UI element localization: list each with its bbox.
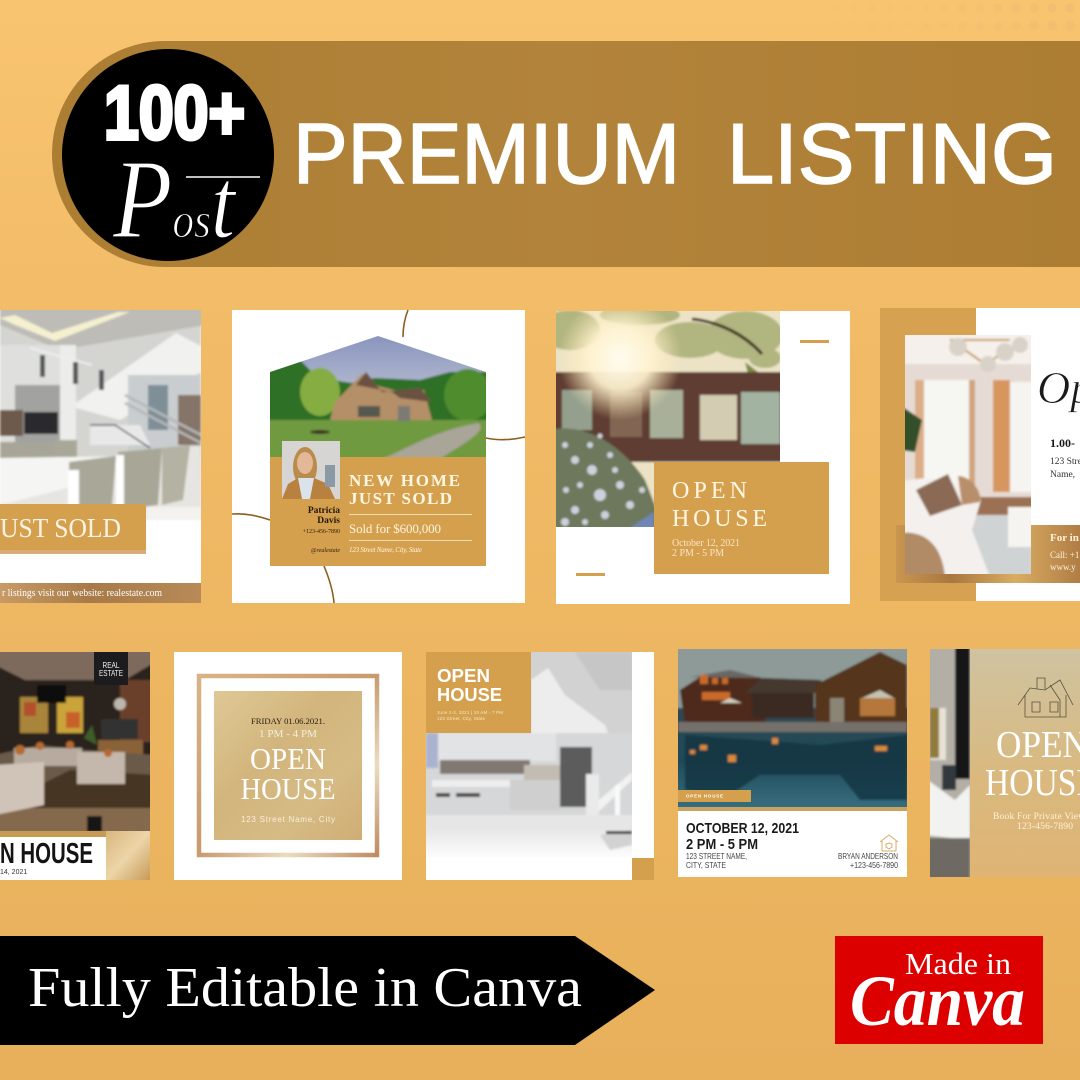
date — [672, 538, 740, 559]
card: dark living room — [0, 647, 155, 880]
gold corner panel — [426, 652, 531, 733]
footer bar — [0, 583, 201, 603]
card: overlay open house — [925, 644, 1080, 882]
date and time — [686, 820, 799, 853]
date: 2 PM - 5 PM — [672, 548, 724, 559]
open house tag — [678, 790, 751, 802]
house sketch icon — [1018, 678, 1073, 717]
gold panel — [270, 457, 486, 566]
agent: +123-456-7890 — [850, 860, 898, 870]
address: CITY, STATE — [686, 860, 726, 870]
date and time: 1 PM - 4 PM — [259, 729, 318, 740]
title: LISTING — [727, 107, 1057, 202]
headline — [437, 666, 502, 705]
event details: 1.00- — [1050, 436, 1075, 450]
headline: OPEN — [672, 478, 747, 504]
agent — [838, 851, 898, 870]
date: 14, 2021 — [0, 869, 27, 876]
badge: 100+ Post — [62, 49, 274, 262]
address: 123 STREET NAME, — [686, 851, 747, 861]
banner shape — [52, 41, 1080, 267]
living room photo — [0, 647, 155, 838]
card: gold frame open house — [174, 652, 402, 880]
gold overlay — [970, 649, 1080, 877]
date and time: 2 PM - 5 PM — [686, 836, 758, 853]
sunlit house photo — [556, 311, 780, 527]
card: script open house — [880, 308, 1080, 601]
arrow banner — [0, 936, 655, 1045]
headline: HOUSE — [437, 685, 502, 705]
badge: 100+ Post: 100+ — [104, 71, 245, 156]
banner text: Fully Editable in Canva — [28, 957, 582, 1019]
agent details: Patricia — [308, 506, 340, 516]
real estate tag: REAL — [102, 661, 120, 670]
headline: JUST SOLD — [349, 489, 452, 508]
headline — [985, 724, 1080, 804]
headline: OPEN — [437, 666, 490, 686]
real estate tag: ESTATE — [99, 669, 123, 678]
open house tag: OPEN HOUSE — [686, 794, 723, 798]
label text: UST SOLD — [0, 513, 121, 543]
card: open house sunlit — [540, 296, 850, 604]
agent details — [303, 506, 340, 554]
agent details: @realestate — [311, 548, 340, 554]
address — [686, 851, 747, 870]
agent details: Davis — [317, 516, 340, 526]
date: October 12, 2021 — [672, 538, 740, 549]
date and address — [437, 710, 503, 721]
card: new home just sold — [232, 310, 525, 603]
card: open house kitchen — [420, 646, 654, 880]
date and address: June 2-3, 2021 | 10 AM - 7 PM — [437, 710, 503, 715]
date and time: OCTOBER 12, 2021 — [686, 820, 799, 837]
address: 123 Street Name, City, State — [349, 546, 422, 554]
booking text — [993, 812, 1080, 832]
canva wordmark: Canva — [850, 961, 1025, 1041]
headline — [240, 741, 336, 806]
gold square — [214, 691, 362, 840]
card: resort pool — [672, 643, 913, 877]
footer text: r listings visit our website: realestate.com — [2, 588, 162, 599]
gold strip — [678, 807, 907, 811]
badge: 100+ Post: Post — [112, 138, 237, 262]
headline — [672, 478, 767, 532]
contact details: For in — [1050, 532, 1079, 544]
contact details: Call: +1 — [1050, 550, 1079, 560]
date and time — [251, 716, 325, 740]
title: PREMIUM — [293, 107, 680, 202]
address: 123 Street Name, City — [241, 815, 335, 824]
real estate tag — [94, 652, 128, 685]
agent: BRYAN ANDERSON — [838, 851, 898, 861]
headline: HOUSE — [240, 771, 336, 806]
agent portrait — [282, 441, 340, 499]
icon: house — [880, 835, 898, 851]
header banner — [52, 41, 1080, 267]
contact details: www.y — [1050, 562, 1076, 572]
event details — [1050, 436, 1080, 480]
made in: Made in — [905, 946, 1012, 981]
gold texture block — [106, 831, 150, 880]
gold panel — [654, 462, 829, 574]
headline: OPEN — [250, 741, 326, 776]
headline: N HOUSE — [0, 838, 93, 870]
date and address: 123 Street, City, State — [437, 716, 485, 721]
resort photo — [678, 649, 907, 807]
headline: NEW HOME — [349, 471, 460, 490]
event details: Name, — [1050, 470, 1075, 480]
kitchen photo — [426, 652, 632, 852]
canva badge — [835, 936, 1043, 1044]
contact details — [1050, 532, 1079, 572]
curved accents — [232, 310, 525, 603]
dot pattern decoration — [761, 3, 1075, 31]
house photo — [270, 336, 486, 457]
card: just sold interior — [0, 305, 206, 603]
gold label — [0, 504, 146, 550]
agent details: +123-456-7890 — [303, 529, 340, 535]
headline: HOUSE — [672, 506, 767, 532]
title — [293, 107, 1057, 202]
bronze strip — [896, 525, 1080, 583]
room photo — [930, 649, 970, 877]
headline — [349, 471, 460, 508]
date and time: FRIDAY 01.06.2021. — [251, 716, 325, 726]
price: Sold for $600,000 — [349, 521, 441, 536]
living room photo — [905, 335, 1031, 574]
gold frame — [199, 676, 377, 855]
booking text: 123-456-7890 — [1017, 822, 1073, 832]
interior photo — [0, 310, 201, 520]
